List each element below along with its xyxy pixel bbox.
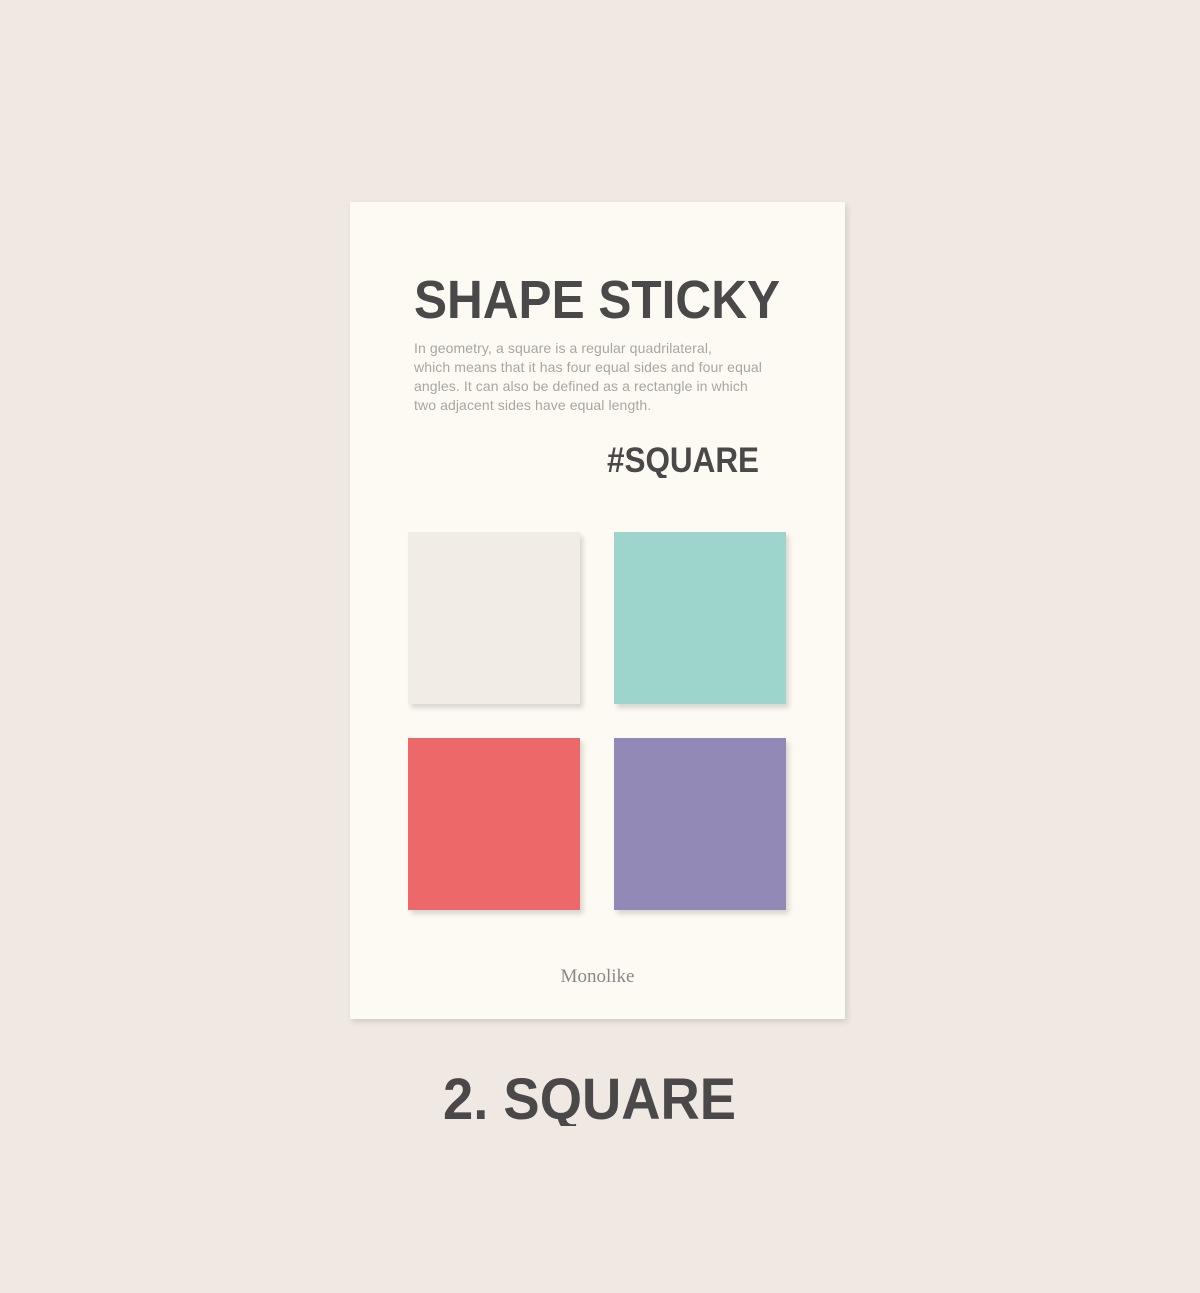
brand: Monolike: Monolike [561, 966, 634, 987]
description text: In geometry, a square is a regular quadrilateral, [414, 340, 712, 356]
square: coral [408, 738, 580, 910]
description text: two adjacent sides have equal length. [414, 397, 651, 413]
description text: angles. It can also be defined as a rectangle in which [414, 378, 748, 394]
description text: which means that it has four equal sides and four equal [414, 359, 762, 375]
square: purple [614, 738, 786, 910]
square: cream [408, 532, 580, 704]
square: mint [614, 532, 786, 704]
panel: card [350, 202, 845, 1019]
description text [414, 340, 762, 413]
